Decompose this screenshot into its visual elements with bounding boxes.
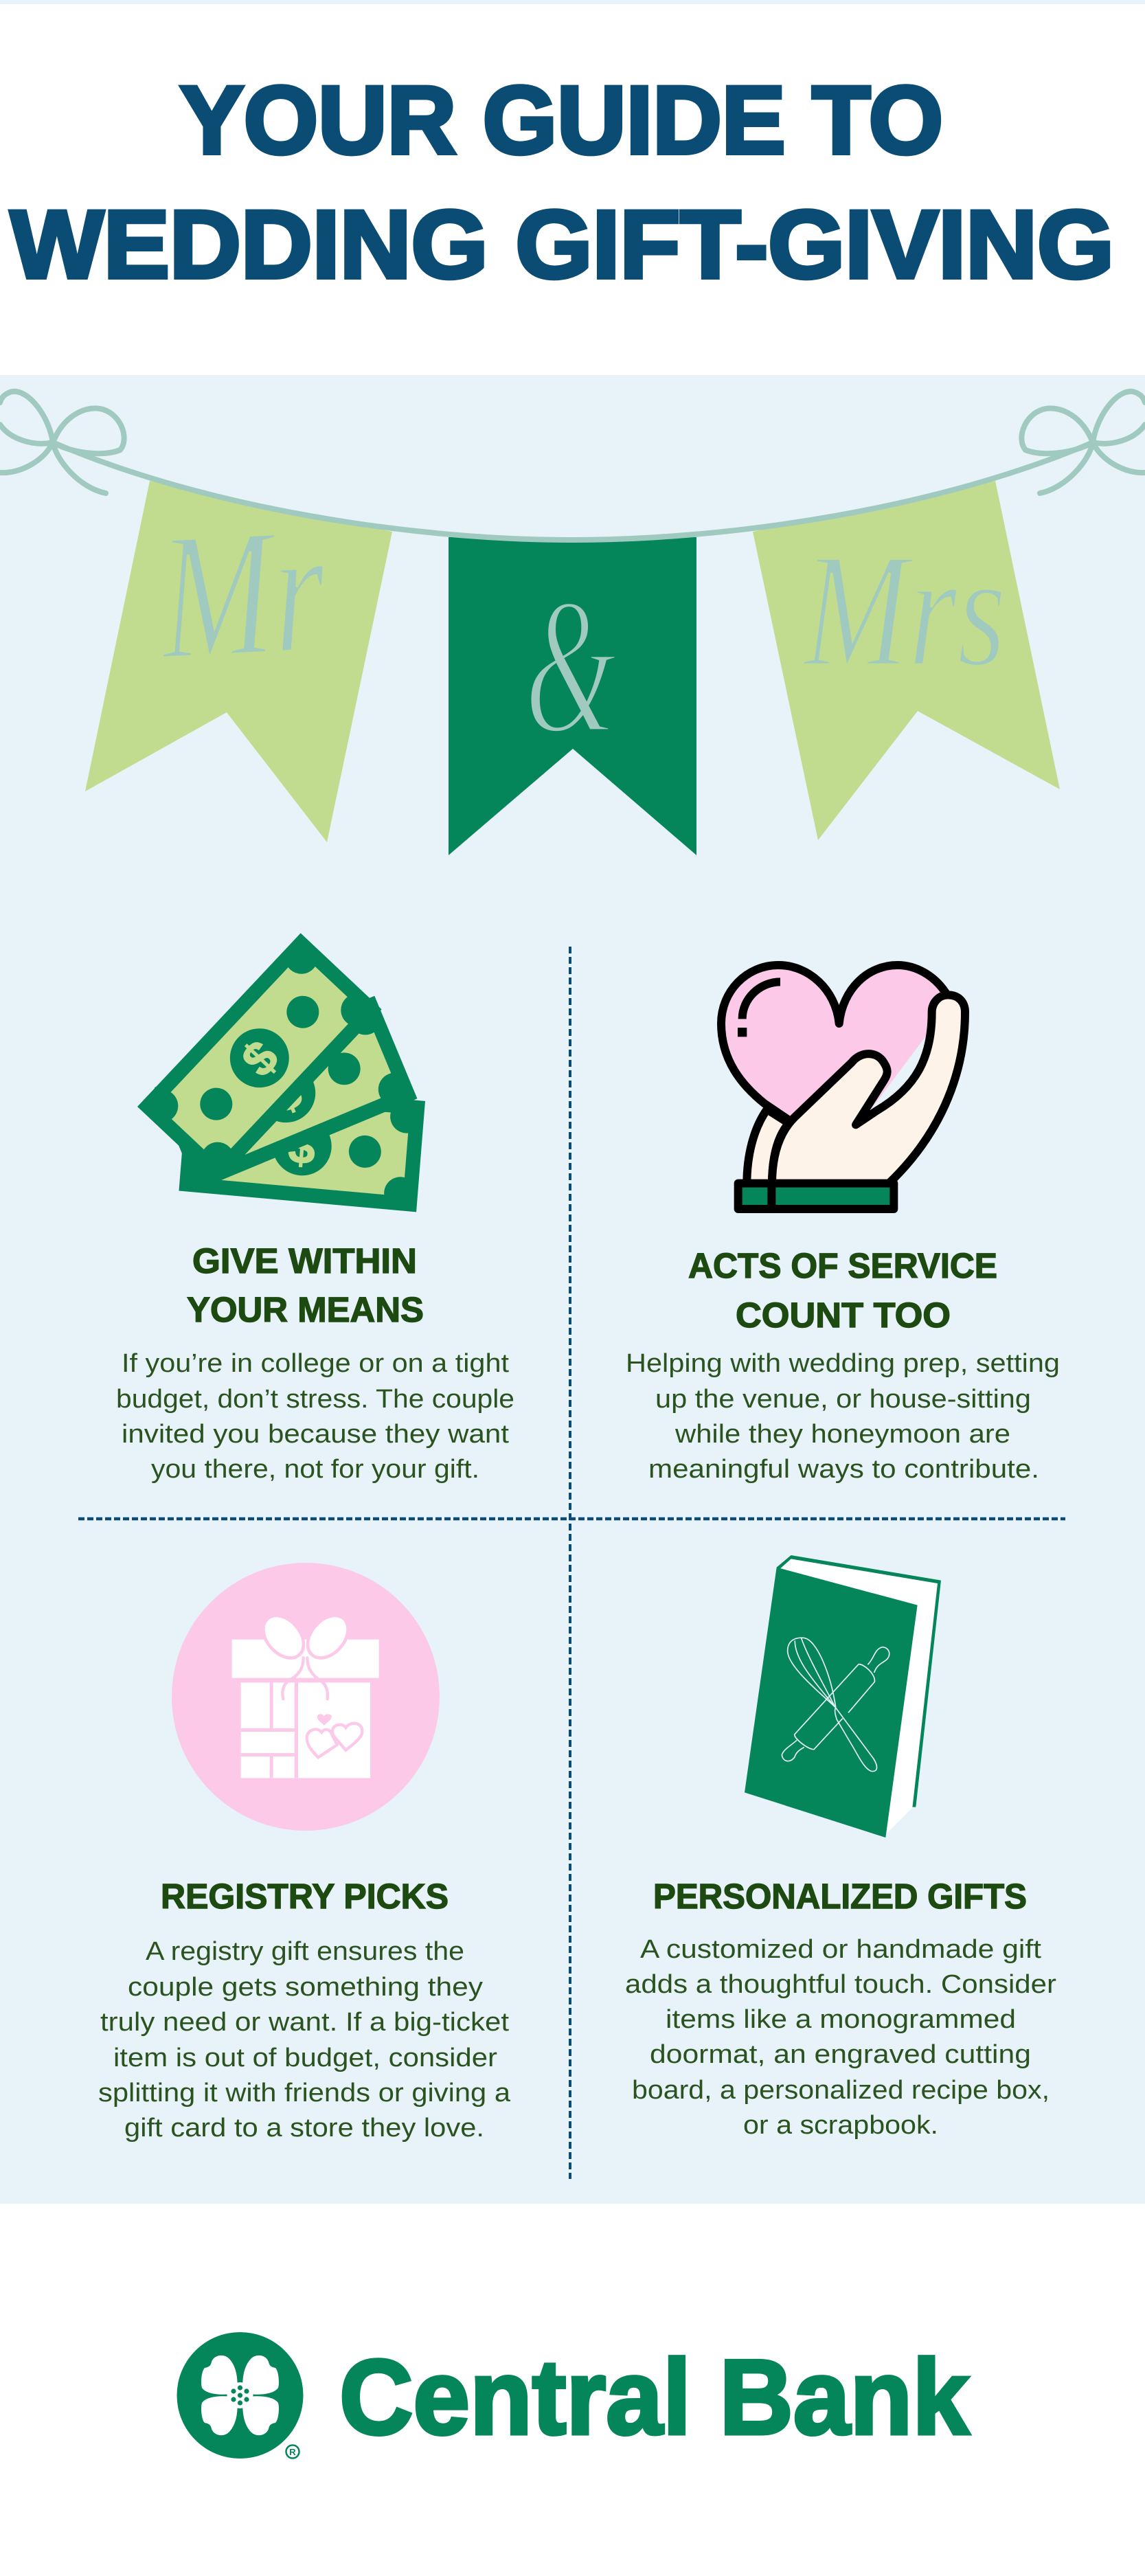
registered mark xyxy=(286,2445,299,2458)
icon: recipe book xyxy=(745,1555,941,1838)
body text: A registry gift ensures the xyxy=(146,1937,464,1966)
heading: COUNT TOO xyxy=(736,1296,951,1335)
body text xyxy=(625,1935,1056,2140)
body text: splitting it with friends or giving a xyxy=(98,2079,511,2108)
flag: Mrs xyxy=(753,481,1060,840)
banner: Mr and Mrs bunting xyxy=(0,392,1145,855)
body text: doormat, an engraved cutting xyxy=(650,2040,1031,2069)
body text: or a scrapbook. xyxy=(743,2111,938,2140)
body text: invited you because they want xyxy=(122,1420,509,1449)
logo mark: dogwood flower xyxy=(177,2332,304,2459)
flag: Mr xyxy=(85,481,392,842)
heart xyxy=(721,965,946,1121)
hearts xyxy=(307,1714,362,1757)
heading: GIVE WITHIN xyxy=(192,1241,417,1280)
panel: personalized gifts xyxy=(625,1877,1056,2140)
hand xyxy=(772,995,965,1184)
body text: item is out of budget, consider xyxy=(113,2044,497,2072)
gift lid xyxy=(232,1640,379,1678)
body text: Helping with wedding prep, setting xyxy=(626,1349,1060,1378)
body text: A customized or handmade gift xyxy=(640,1935,1041,1964)
panel: light blue background xyxy=(0,375,1145,2204)
heading: PERSONALIZED GIFTS xyxy=(653,1877,1027,1916)
body text: couple gets something they xyxy=(128,1973,483,2002)
body text: you there, not for your gift. xyxy=(151,1455,479,1484)
heading: YOUR MEANS xyxy=(187,1290,424,1329)
vertical dashed divider xyxy=(569,947,571,2179)
title: YOUR GUIDE TO xyxy=(180,66,943,174)
body text: board, a personalized recipe box, xyxy=(632,2076,1050,2105)
body text: If you’re in college or on a tight xyxy=(122,1349,509,1378)
body text: up the venue, or house-sitting xyxy=(655,1385,1031,1414)
heading xyxy=(187,1241,424,1329)
front cover xyxy=(745,1568,918,1838)
body text: while they honeymoon are xyxy=(674,1420,1010,1449)
title: WEDDING GIFT-GIVING xyxy=(10,190,1114,298)
icon: dollar bills xyxy=(137,933,425,1212)
bow strings xyxy=(282,1658,328,1699)
flag: ampersand: & xyxy=(525,558,617,774)
body text: adds a thoughtful touch. Consider xyxy=(625,1970,1056,1999)
heading xyxy=(688,1246,997,1335)
body text xyxy=(626,1349,1060,1484)
panel: acts of service xyxy=(626,1246,1060,1484)
cuff xyxy=(738,1184,894,1209)
heading: ACTS OF SERVICE xyxy=(688,1246,997,1285)
body text: budget, don’t stress. The couple xyxy=(116,1385,514,1414)
whisk and rolling pin xyxy=(782,1638,889,1772)
body text xyxy=(116,1349,514,1484)
flag: Mr: Mr xyxy=(153,490,331,698)
flag: ampersand xyxy=(449,537,696,855)
ribbons xyxy=(241,1682,298,1778)
heart highlight xyxy=(742,982,780,1019)
flag: Mrs: Mrs xyxy=(802,521,1006,701)
rear finger xyxy=(747,1109,789,1184)
string and bows xyxy=(0,392,1145,540)
heading: REGISTRY PICKS xyxy=(161,1877,449,1916)
pages xyxy=(780,1559,938,1833)
body text xyxy=(98,1937,511,2143)
title xyxy=(10,66,1114,298)
logo: Central Bank xyxy=(177,2332,970,2459)
bow xyxy=(256,1608,356,1666)
back cover xyxy=(777,1555,941,1807)
panel: registry picks xyxy=(98,1877,511,2143)
registered mark: R xyxy=(289,2447,296,2457)
panel: give within your means xyxy=(116,1241,514,1484)
horizontal dashed divider xyxy=(78,1517,1065,1520)
icon: hand holding heart xyxy=(721,965,965,1209)
gift box xyxy=(241,1682,370,1778)
body text: gift card to a store they love. xyxy=(124,2114,484,2143)
body text: meaningful ways to contribute. xyxy=(648,1455,1039,1484)
top strip xyxy=(0,0,1145,4)
wordmark: Central Bank xyxy=(339,2338,970,2456)
body text: truly need or want. If a big-ticket xyxy=(100,2008,509,2037)
body text: items like a monogrammed xyxy=(666,2005,1016,2034)
icon: gift in pink circle xyxy=(172,1563,440,1831)
